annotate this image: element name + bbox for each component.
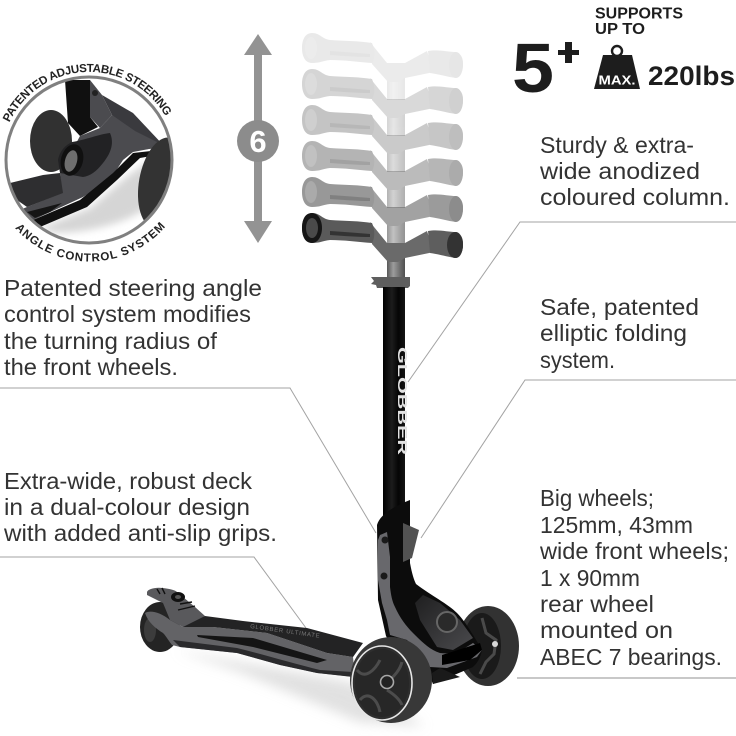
text: deck: in a dual-colour design (4, 494, 250, 520)
inset photo of the steering joint (10, 80, 170, 236)
text: folding system: system. (540, 347, 615, 373)
collar (371, 277, 410, 288)
height adjustment arrow with 6 positions: 6 (249, 124, 267, 159)
age badge 5+ (512, 29, 579, 107)
inset ring (6, 77, 172, 243)
inset circle: steering detail (2, 64, 174, 262)
icon: max weight (594, 46, 640, 89)
icon: max weight: MAX. (598, 72, 636, 88)
weight limit heading (595, 6, 683, 38)
screws (380, 536, 388, 580)
inset top label: PATENTED ADJUSTABLE STEERING (2, 64, 171, 122)
folding body black (377, 500, 482, 684)
age badge 5+: 5 (512, 29, 554, 107)
column brand text: GLOBBER (395, 347, 410, 456)
text: folding system: Safe, patented (540, 294, 699, 320)
handlebars: six height positions (302, 33, 463, 280)
text: steering angle: Patented steering angle (4, 275, 262, 301)
grey side frame (378, 532, 482, 668)
text: wheels: wide front wheels; (539, 538, 729, 564)
height adjustment arrow with 6 positions (237, 34, 279, 243)
weight limit heading: SUPPORTS (595, 6, 683, 22)
front wheel (350, 637, 460, 723)
ground shadow (175, 650, 425, 726)
text: column: coloured column. (540, 184, 730, 210)
rear wheel right (457, 606, 519, 686)
text: wheels: rear wheel (540, 591, 654, 617)
text: column (539, 132, 730, 210)
text: wheels: mounted on (540, 617, 673, 643)
text: wheels: ABEC 7 bearings. (540, 644, 722, 670)
text: deck: with added anti-slip grips. (3, 520, 277, 546)
text: wheels (539, 485, 729, 670)
black slot (442, 643, 482, 665)
weight limit heading: UP TO (595, 21, 645, 38)
folding wedge (403, 523, 419, 562)
text: steering angle (4, 275, 262, 380)
text: steering angle: the front wheels. (4, 354, 178, 380)
text: folding system (540, 294, 699, 373)
fold cover (415, 595, 473, 650)
text: steering angle: the turning radius of (4, 328, 217, 354)
text: column: Sturdy & extra- (540, 132, 694, 158)
text: folding system: elliptic folding (540, 320, 687, 346)
text: steering angle: control system modifies (4, 301, 251, 327)
text: column: wide anodized (539, 158, 700, 184)
deck (140, 588, 363, 677)
inset bottom label: ANGLE CONTROL SYSTEM (15, 222, 165, 262)
text: deck (3, 468, 277, 546)
text: wheels: 1 x 90mm (540, 565, 640, 591)
text: deck: Extra-wide, robust deck (4, 468, 252, 494)
text: wheels: 125mm, 43mm (540, 512, 693, 538)
scooter (140, 277, 519, 726)
callout leader lines (0, 222, 736, 678)
weight limit value: 220lbs (648, 61, 735, 91)
text: wheels: Big wheels; (540, 485, 654, 511)
deck brand text: GLOBBER ULTIMATE (250, 624, 320, 640)
black column (383, 287, 405, 522)
